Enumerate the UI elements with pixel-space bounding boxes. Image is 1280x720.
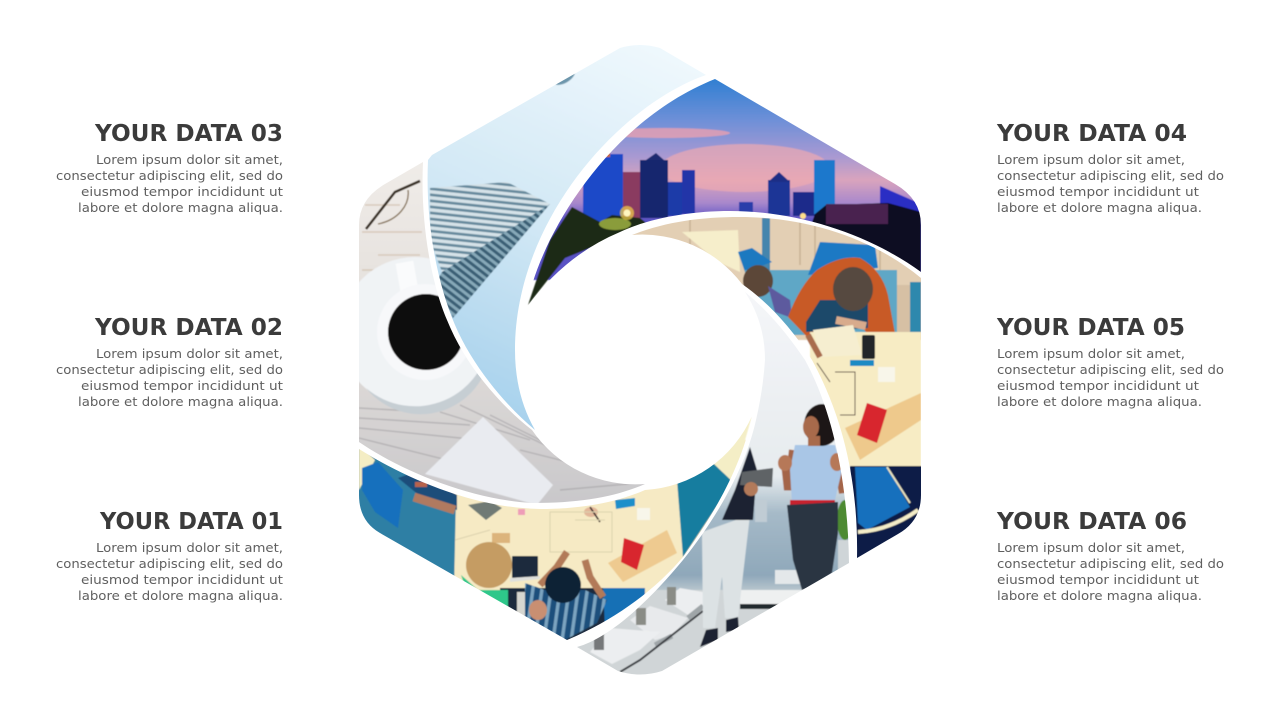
body: your data 03 (56, 153, 283, 215)
body: your data 01: labore et dolore magna aliqua. (78, 589, 283, 603)
text block: your data 03 (56, 121, 283, 215)
body: your data 01: eiusmod tempor incididunt ut (81, 573, 283, 587)
body: your data 04: consectetur adipiscing elit, sed do (997, 169, 1224, 183)
hexagon photo pinwheel (340, 40, 930, 680)
body: your data 04: labore et dolore magna aliqua. (997, 201, 1202, 215)
body: your data 06 (997, 541, 1224, 603)
text block: your data 01 (56, 509, 283, 603)
heading: your data 06: YOUR DATA 06 (996, 509, 1187, 535)
body: your data 03: eiusmod tempor incididunt ut (81, 185, 283, 199)
body: your data 05: labore et dolore magna aliqua. (997, 395, 1202, 409)
body: your data 05: consectetur adipiscing elit, sed do (997, 363, 1224, 377)
body: your data 01 (56, 541, 283, 603)
heading: your data 01: YOUR DATA 01 (99, 509, 283, 535)
text block: your data 06 (996, 509, 1224, 603)
text block: your data 05 (996, 315, 1224, 409)
body: your data 03: Lorem ipsum dolor sit amet, (96, 153, 283, 167)
body: your data 02: labore et dolore magna aliqua. (78, 395, 283, 409)
body: your data 02: Lorem ipsum dolor sit amet, (96, 347, 283, 361)
body: your data 04: eiusmod tempor incididunt ut (997, 185, 1199, 199)
body: your data 06: Lorem ipsum dolor sit amet, (997, 541, 1185, 555)
body: your data 06: labore et dolore magna aliqua. (997, 589, 1202, 603)
woman (785, 450, 843, 493)
man with tablet (702, 515, 750, 628)
heading: your data 02: YOUR DATA 02 (94, 315, 283, 341)
body: your data 03: consectetur adipiscing elit, sed do (56, 169, 283, 183)
body: your data 05 (997, 347, 1224, 409)
heading: your data 04: YOUR DATA 04 (996, 121, 1187, 147)
body: your data 02 (56, 347, 283, 409)
body: your data 05: Lorem ipsum dolor sit amet, (997, 347, 1185, 361)
segment 05: desk from above photo (632, 217, 921, 558)
plant (837, 500, 848, 540)
segment 04: city skyline photo (520, 70, 930, 305)
stairs (590, 587, 703, 672)
heading: your data 05: YOUR DATA 05 (996, 315, 1185, 341)
body: your data 06: consectetur adipiscing elit, sed do (997, 557, 1224, 571)
segment 01: team around table photo (355, 416, 765, 650)
icon: eyeglasses (366, 181, 420, 229)
segment 03: skyscraper photo (428, 45, 706, 430)
body: your data 03: labore et dolore magna aliqua. (78, 201, 283, 215)
body: your data 01: Lorem ipsum dolor sit amet, (96, 541, 283, 555)
text block: your data 04 (996, 121, 1224, 215)
body: your data 04 (997, 153, 1224, 215)
body: your data 04: Lorem ipsum dolor sit amet, (997, 153, 1185, 167)
segment 06: two colleagues walking photo (577, 293, 849, 674)
segment 02: coffee cup on wood table photo (359, 162, 645, 503)
heading: your data 03: YOUR DATA 03 (94, 121, 283, 147)
body: your data 02: consectetur adipiscing elit, sed do (56, 363, 283, 377)
text block: your data 02 (56, 315, 283, 409)
body: your data 06: eiusmod tempor incididunt ut (997, 573, 1199, 587)
body: your data 01: consectetur adipiscing elit, sed do (56, 557, 283, 571)
body: your data 02: eiusmod tempor incididunt ut (81, 379, 283, 393)
body: your data 05: eiusmod tempor incididunt ut (997, 379, 1199, 393)
